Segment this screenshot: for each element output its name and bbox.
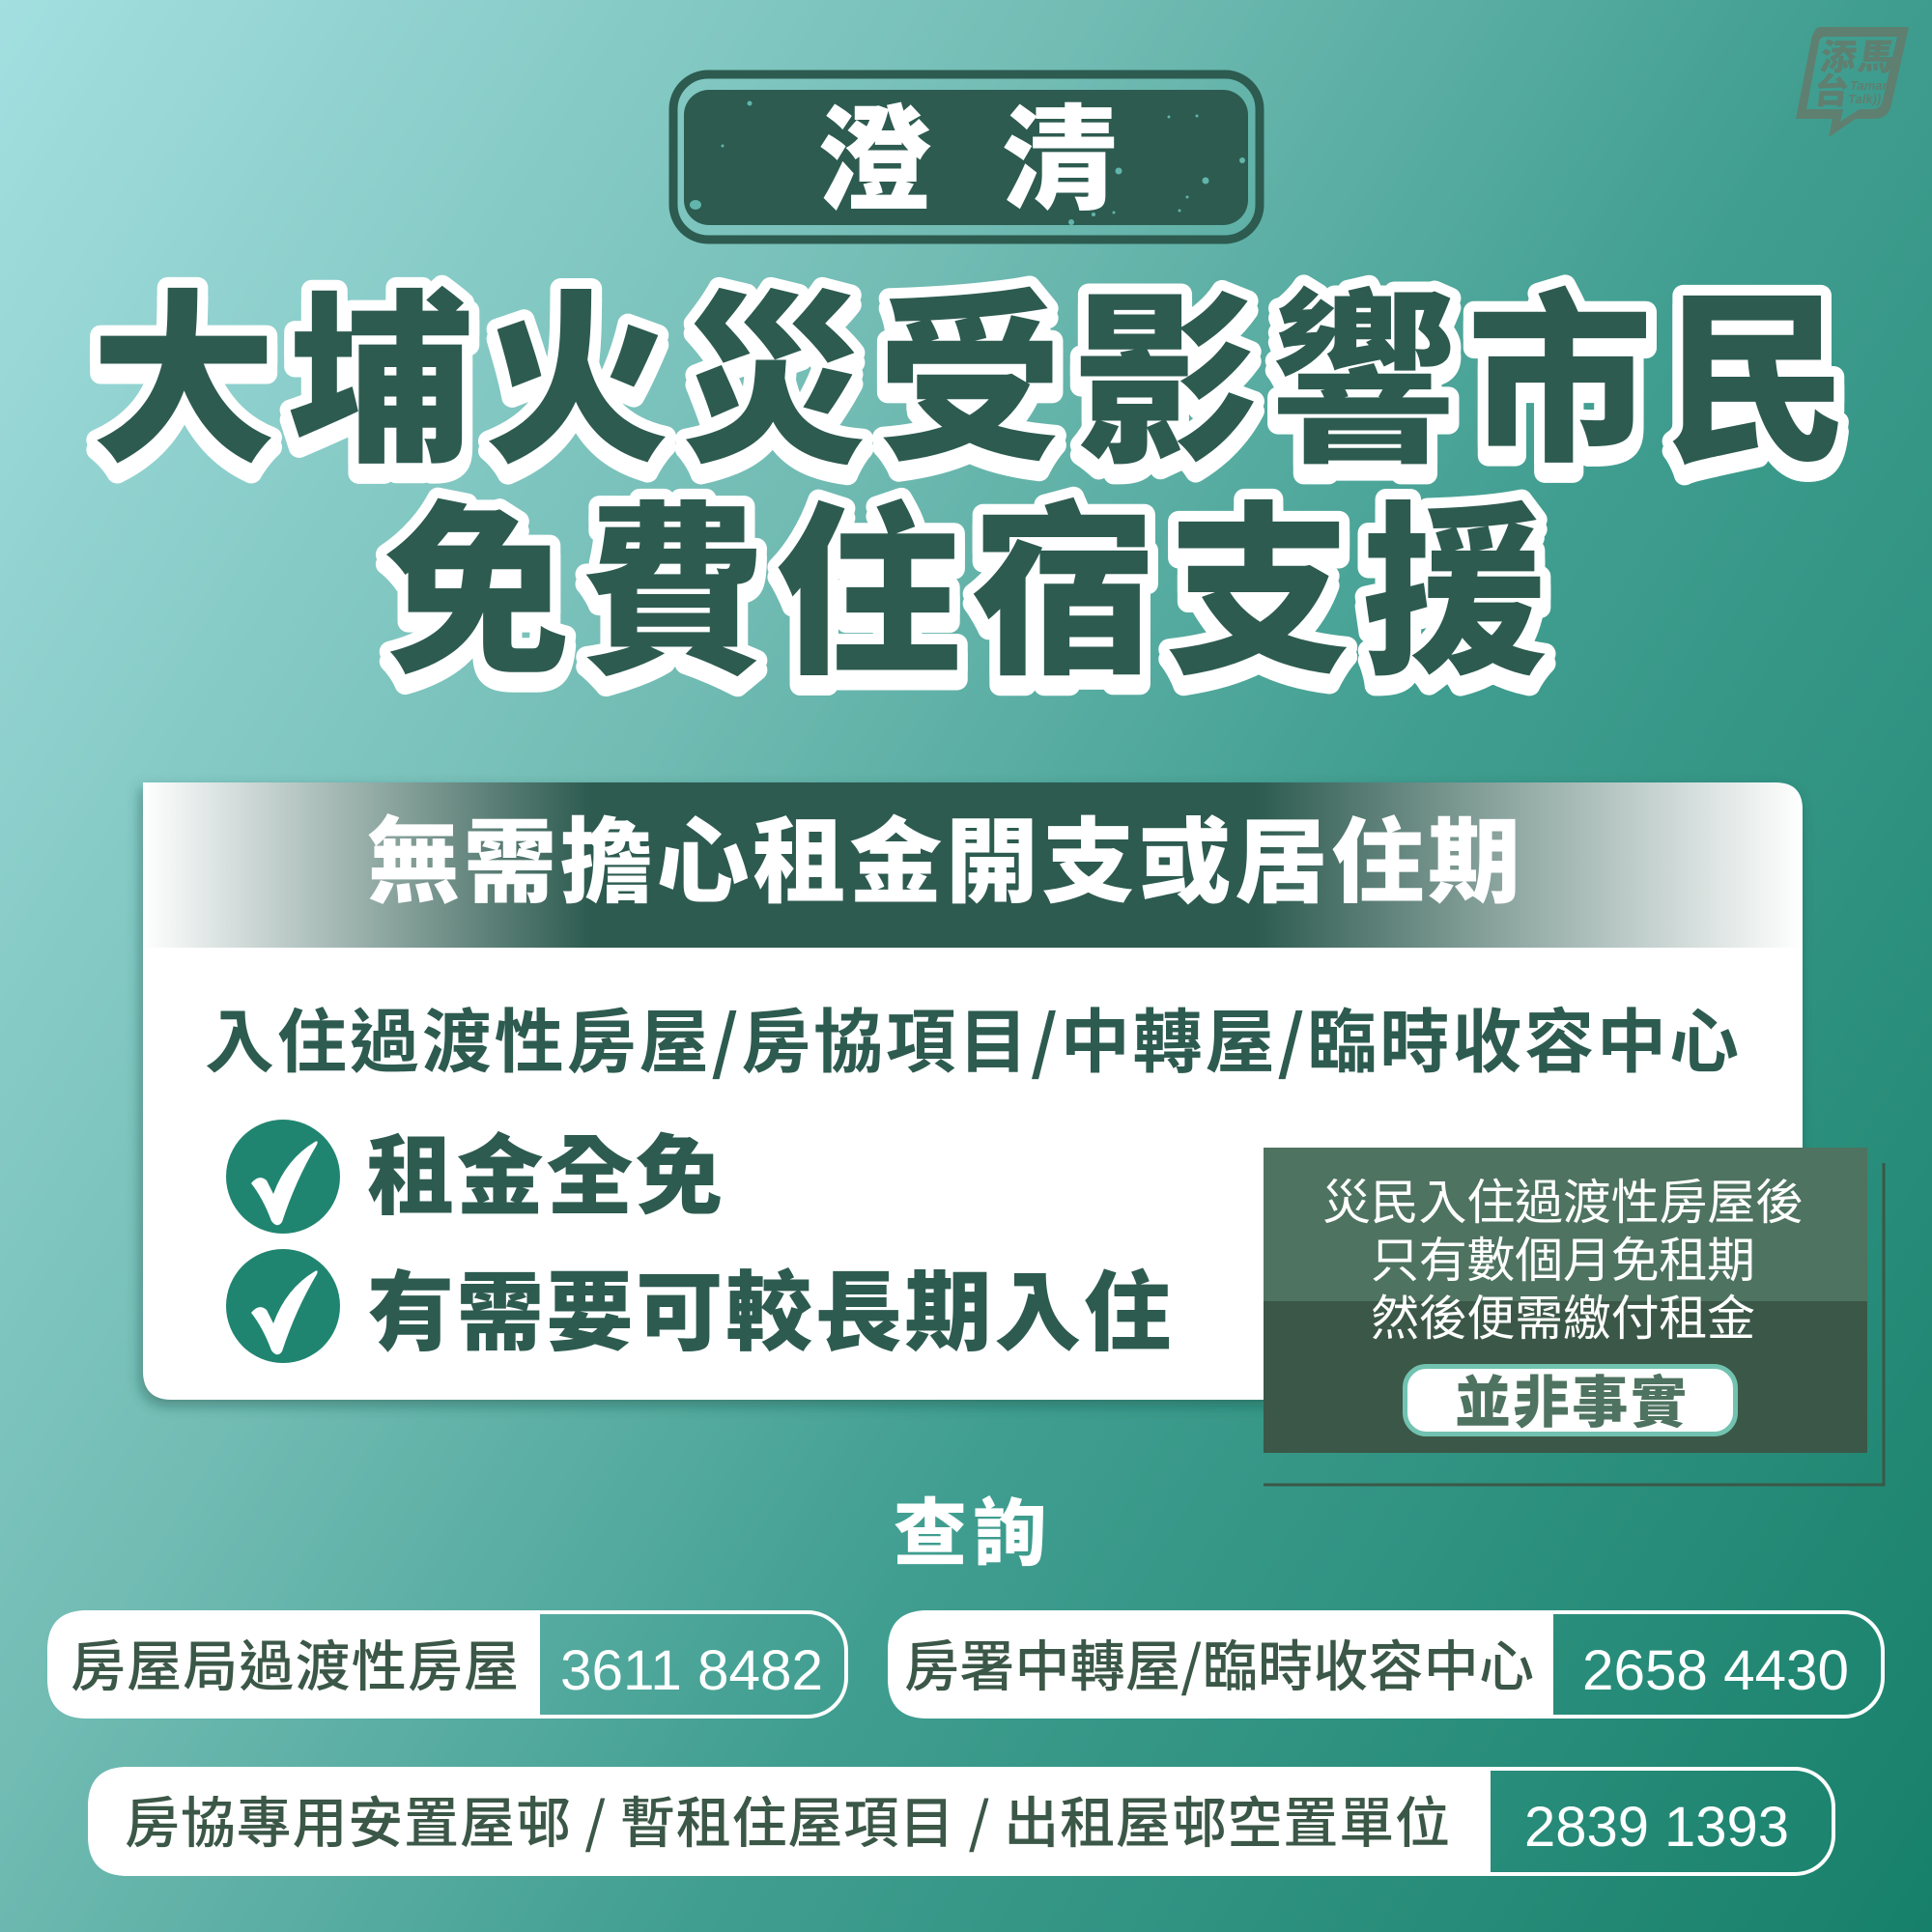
title line 2: 免費住宿支援 — [384, 443, 1548, 712]
title line 1: 大埔火災受影響市民 — [91, 242, 1849, 510]
contact pill 1: 房屋局過渡性房屋 — [71, 1623, 519, 1702]
title line 2: 免費住宿支援 — [384, 453, 1548, 722]
panel heading: 無需擔心租金開支或居住期 — [367, 787, 1520, 922]
contact pill 1: 3611 8482 — [560, 1639, 823, 1702]
badge: 澄清 — [673, 68, 1260, 240]
contact pill 2: 2658 4430 — [1582, 1639, 1849, 1702]
logo: Tamar Talk speech bubble: Tamar — [1850, 78, 1888, 93]
main title — [91, 232, 1849, 722]
not-fact button: 並非事實 — [1455, 1357, 1687, 1438]
callout: rumour box — [1264, 1148, 1884, 1485]
title line 1: 大埔火災受影響市民 — [91, 232, 1849, 500]
panel header band — [143, 782, 1803, 948]
badge text: 澄 清 — [817, 68, 1117, 233]
logo: Tamar Talk speech bubble: 添馬 — [1817, 28, 1898, 80]
sub heading: 入住過渡性房屋/房協項目/中轉屋/臨時收容中心 — [205, 985, 1739, 1087]
title line 1: 大埔火災受影響市民 — [91, 232, 1849, 500]
check item 1: 租金全免 — [367, 1106, 723, 1232]
contact pill 2: 房署中轉屋/臨時收容中心 — [904, 1623, 1534, 1702]
logo: Tamar Talk speech bubble: 台 — [1812, 64, 1852, 114]
contact pill 1 — [47, 1610, 846, 1719]
check item 2: 有需要可較長期入住 — [367, 1242, 1171, 1368]
rumour text: 災民入住過渡性房屋後 — [1322, 1164, 1804, 1234]
contact pill 3: 2839 1393 — [1524, 1796, 1789, 1859]
contact pill 2 — [888, 1610, 1883, 1719]
rumour text: 只有數個月免租期 — [1371, 1222, 1755, 1292]
rumour text — [1322, 1164, 1804, 1350]
heading: enquiries: 查詢 — [894, 1474, 1046, 1580]
title line 2: 免費住宿支援 — [384, 443, 1548, 712]
logo: Tamar Talk speech bubble: Talk)) — [1848, 92, 1881, 106]
panel: main white card — [143, 782, 1803, 1400]
contact pill 3: 房協專用安置屋邨 / 暫租住屋項目 / 出租屋邨空置單位 — [125, 1779, 1450, 1859]
contact pill 3 — [88, 1767, 1833, 1876]
logo: Tamar Talk speech bubble — [1796, 27, 1909, 137]
rumour text: 然後便需繳付租金 — [1371, 1280, 1755, 1350]
